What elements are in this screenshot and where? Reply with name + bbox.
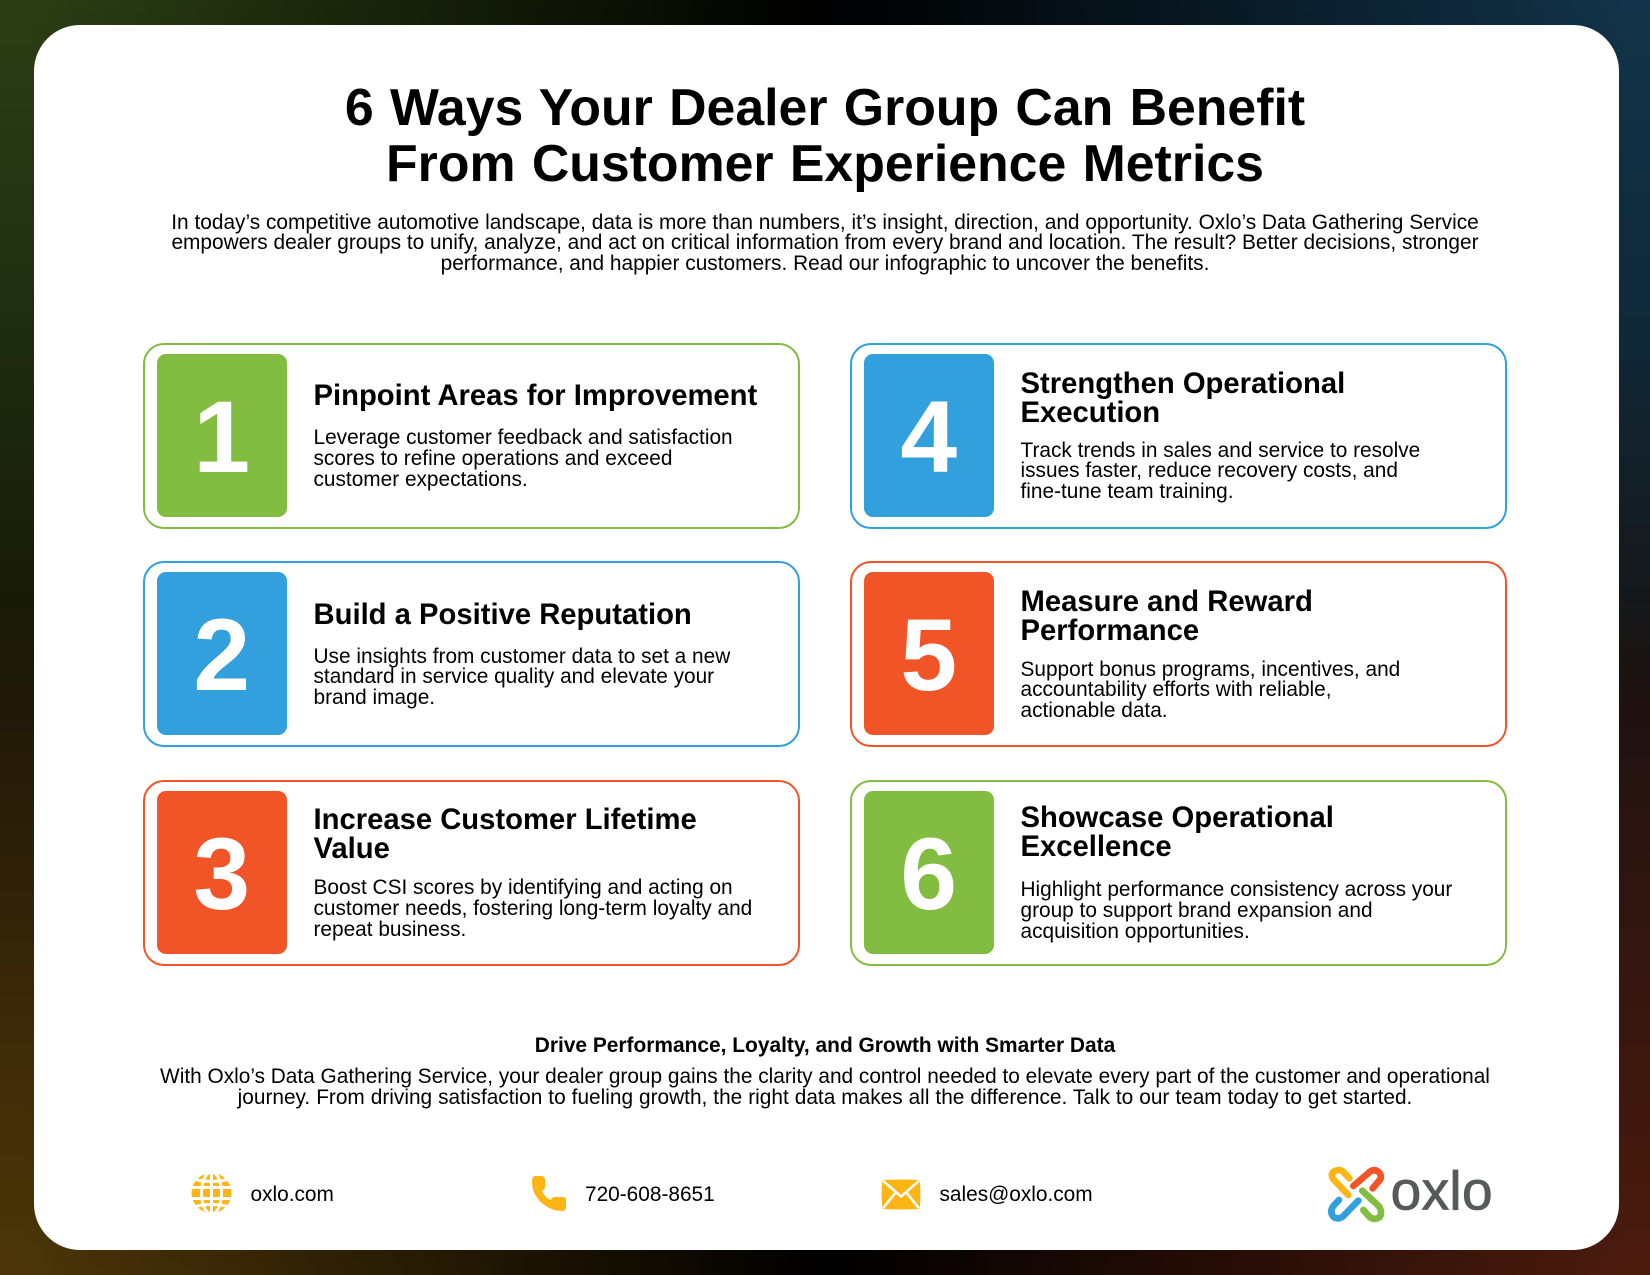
closing paragraph — [160, 1065, 1490, 1109]
number 3: 3 — [193, 817, 250, 931]
card 4 body: Track trends in sales and service to resolve — [1020, 438, 1420, 462]
card 5 body: accountability efforts with reliable, — [1020, 678, 1332, 701]
number 3 — [156, 791, 287, 954]
card 6 body: Highlight performance consistency across your — [1020, 878, 1452, 901]
card 3 body — [314, 876, 752, 941]
intro paragraph: empowers dealer groups to unify, analyze, and act on critical information from every brand and location. The result? Better decisions, stronger — [171, 231, 1479, 254]
icon: envelope — [882, 1180, 920, 1210]
number 1: 1 — [193, 380, 250, 494]
card 5 heading: Performance — [1020, 615, 1199, 647]
card 2 heading: Build a Positive Reputation — [314, 599, 692, 631]
card 2 body: standard in service quality and elevate your — [314, 665, 714, 688]
card 4 heading: Strengthen Operational — [1020, 368, 1345, 400]
number 6 — [864, 791, 994, 954]
number 2 — [156, 572, 287, 735]
email address: sales@oxlo.com — [940, 1183, 1093, 1206]
number 5: 5 — [900, 598, 957, 712]
card 2: positive reputation — [142, 561, 800, 746]
card 6 body: acquisition opportunities. — [1020, 920, 1250, 943]
logo wordmark: oxlo — [1391, 1160, 1493, 1222]
card 4: operational execution — [850, 343, 1506, 528]
card 6: operational excellence — [850, 780, 1506, 966]
intro paragraph: In today’s competitive automotive landscape, data is more than numbers, it’s insight, direction, and opportunity. Oxlo’s Data Gathering Service — [171, 210, 1479, 234]
intro paragraph — [171, 210, 1479, 275]
title: 6 Ways Your Dealer Group Can Benefit — [345, 78, 1305, 136]
card 1 heading: Pinpoint Areas for Improvement — [314, 380, 757, 412]
intro paragraph: performance, and happier customers. Read our infographic to uncover the benefits. — [441, 252, 1209, 275]
card 3 heading — [314, 804, 697, 865]
number 5 — [864, 572, 994, 735]
card 2 body — [314, 644, 730, 709]
card 5 heading — [1020, 586, 1313, 647]
card 3 body: customer needs, fostering long-term loyalty and — [314, 897, 752, 920]
closing heading: Drive Performance, Loyalty, and Growth with Smarter Data — [535, 1034, 1115, 1057]
icon: globe — [192, 1173, 232, 1213]
card 2 body: Use insights from customer data to set a new — [314, 644, 730, 668]
card 3 body: Boost CSI scores by identifying and acting on — [314, 876, 733, 899]
card 1 body: scores to refine operations and exceed — [314, 447, 672, 470]
card 1 body — [314, 426, 733, 491]
card 6 heading: Excellence — [1020, 831, 1172, 863]
card 6 body — [1020, 878, 1452, 943]
card 4 body: issues faster, reduce recovery costs, and — [1020, 459, 1398, 482]
number 4: 4 — [900, 380, 957, 494]
card 5 body — [1020, 658, 1400, 722]
phone number: 720-608-8651 — [585, 1183, 715, 1206]
logo mark — [1331, 1170, 1381, 1219]
card 4 body: fine-tune team training. — [1020, 480, 1234, 503]
card 6 body: group to support brand expansion and — [1020, 899, 1373, 922]
card 4 body — [1020, 438, 1420, 503]
card 5: measure and reward — [850, 561, 1506, 746]
card 6 heading — [1020, 802, 1334, 863]
card 6 heading: Showcase Operational — [1020, 802, 1334, 834]
card 1 body: customer expectations. — [314, 468, 528, 491]
closing paragraph: journey. From driving satisfaction to fueling growth, the right data makes all the difference. Talk to our team today to get started. — [238, 1086, 1412, 1109]
card 3 heading: Increase Customer Lifetime — [314, 804, 697, 836]
card 1 body: Leverage customer feedback and satisfaction — [314, 426, 733, 449]
card 5 body: actionable data. — [1020, 699, 1168, 722]
closing paragraph: With Oxlo’s Data Gathering Service, your dealer group gains the clarity and control needed to elevate every part of the customer and operational — [160, 1065, 1490, 1088]
card 5 heading: Measure and Reward — [1020, 586, 1313, 618]
title: From Customer Experience Metrics — [386, 134, 1264, 192]
card 3 body: repeat business. — [314, 918, 466, 941]
card 3 heading: Value — [314, 833, 390, 865]
number 1 — [156, 354, 287, 517]
number 2: 2 — [193, 598, 250, 712]
card 1: pinpoint areas — [142, 343, 800, 528]
icon: phone — [532, 1176, 566, 1211]
number 6: 6 — [900, 817, 957, 931]
number 4 — [864, 354, 994, 517]
website text: oxlo.com — [250, 1183, 334, 1206]
logo: oxlo — [1328, 1160, 1493, 1222]
card 4 heading: Execution — [1020, 397, 1160, 429]
card 5 body: Support bonus programs, incentives, and — [1020, 658, 1400, 680]
card 3: customer lifetime value — [142, 780, 800, 966]
title — [345, 78, 1305, 192]
card 2 body: brand image. — [314, 686, 435, 709]
card 4 heading — [1020, 368, 1345, 429]
